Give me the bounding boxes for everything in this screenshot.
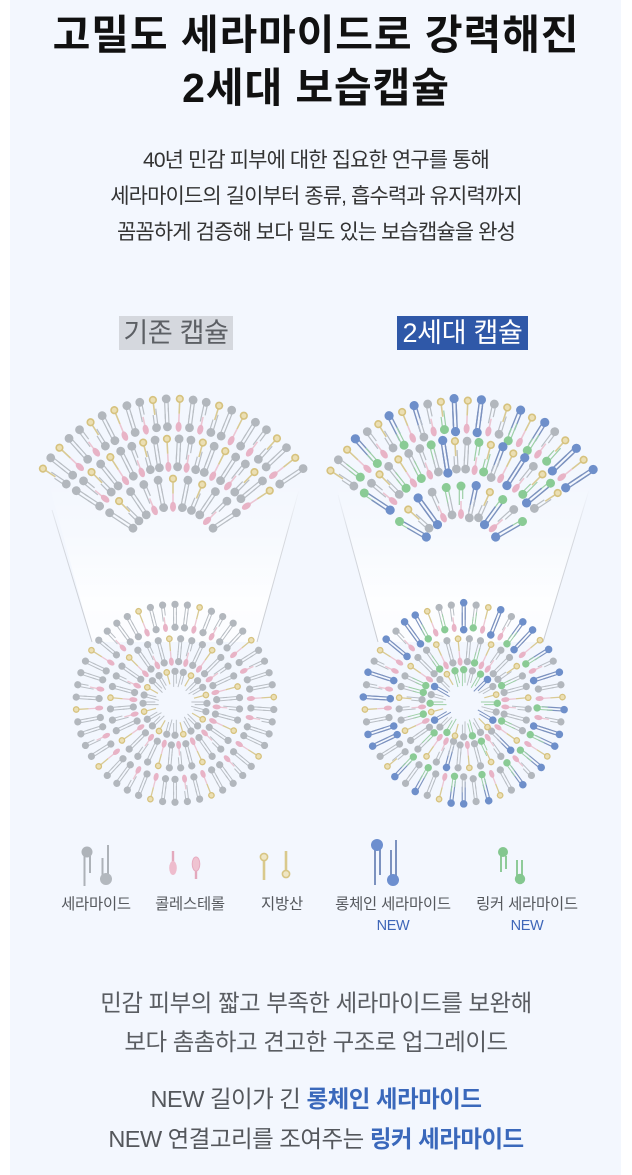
fan: existing capsule close-up [38,394,309,534]
legend: linker ceramide [476,847,578,934]
summary text: 민감 피부의 짧고 부족한 세라마이드를 보완해 [100,990,532,1016]
summary text [100,990,532,1055]
intro text: 40년 민감 피부에 대한 집요한 연구를 통해 [143,149,489,172]
heading: second generation capsule: 2세대 캡슐 [402,318,523,348]
legend: ceramide [61,845,131,913]
new ingredient lines: NEW 길이가 긴 롱체인 세라마이드 [151,1086,481,1112]
legend: cholesterol [155,851,225,913]
title: 2세대 보습캡슐 [182,65,450,111]
legend: ceramide: 세라마이드 [61,896,131,913]
legend: long-chain ceramide [335,839,451,934]
legend: long-chain ceramide: 롱체인 세라마이드 [335,896,451,913]
legend: linker ceramide: 링커 세라마이드 [476,896,578,913]
title: 고밀도 세라마이드로 강력해진 [53,12,579,58]
funnel: second generation capsule [335,480,592,642]
intro text: 세라마이드의 길이부터 종류, 흡수력과 유지력까지 [110,185,522,208]
legend: cholesterol: 콜레스테롤 [155,896,225,913]
heading: existing capsule: 기존 캡슐 [123,318,229,348]
legend: fatty acid: 지방산 [261,896,303,913]
legend: linker ceramide: NEW [511,918,543,934]
funnel: existing capsule [48,480,303,642]
new ingredient lines: NEW 연결고리를 조여주는 링커 세라마이드 [108,1126,524,1152]
ring: second generation capsule [359,599,568,808]
intro text [110,149,522,244]
intro text: 꼼꼼하게 검증해 보다 밀도 있는 보습캡슐을 완성 [117,221,515,244]
title [53,12,579,111]
legend: fatty acid [260,851,303,913]
legend: long-chain ceramide: NEW [377,918,409,934]
fan: second generation close-up [325,394,600,543]
summary text: 보다 촘촘하고 견고한 구조로 업그레이드 [124,1029,508,1055]
ring: existing capsule [61,589,289,817]
new ingredient lines [108,1086,524,1152]
